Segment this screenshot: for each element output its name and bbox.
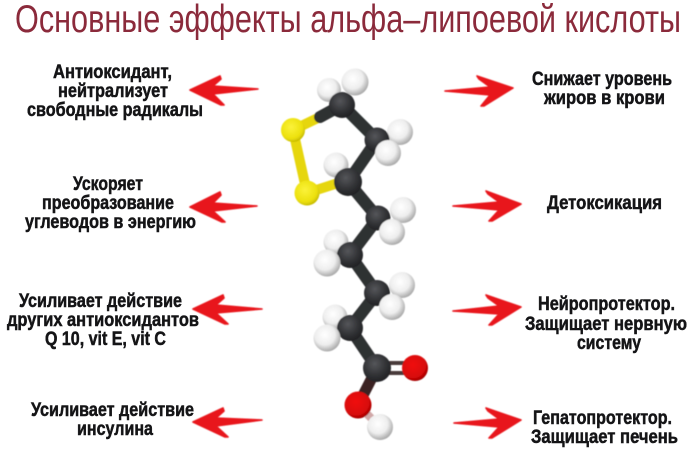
text: right 1: жиров в крови — [543, 88, 665, 109]
arrow: left 1 — [190, 76, 258, 105]
text: left 1 — [27, 62, 203, 121]
text: left 2: преобразование — [42, 193, 174, 214]
carbon atoms — [329, 92, 391, 382]
sulfur atoms — [281, 118, 320, 206]
text: right 2: Детоксикация — [547, 193, 662, 214]
text: right 3 — [525, 294, 687, 354]
arrow: left 3 — [193, 295, 262, 324]
text: right 1 — [532, 69, 672, 109]
text: right 3: систему — [577, 333, 641, 354]
text: left 2: углеводов в энергию — [25, 212, 196, 233]
hydrogen atoms in front — [314, 68, 405, 440]
arrow: right 3 — [453, 295, 521, 325]
arrow: right 2 — [453, 191, 521, 221]
text: left 4: Усиливает действие — [31, 400, 194, 421]
carbon chain bonds — [320, 105, 415, 427]
oxygen atoms — [344, 355, 428, 418]
text: left 3: других антиоксидантов — [7, 310, 199, 331]
text: right 1: Снижает уровень — [532, 69, 672, 90]
arrow: right 4 — [454, 408, 521, 438]
disulfide bonds — [293, 116, 335, 193]
text: right 4: Защищает печень — [531, 427, 678, 448]
text: left 3: Усиливает действие — [19, 291, 182, 312]
text: left 3: Q 10, vit E, vit C — [45, 329, 166, 350]
text: left 2 — [25, 174, 196, 233]
arrow: right 1 — [445, 76, 513, 106]
arrow: left 2 — [190, 192, 257, 222]
text: left 1: Антиоксидант, — [53, 62, 172, 83]
arrow: left 4 — [193, 408, 262, 437]
text: left 1: свободные радикалы — [27, 100, 203, 121]
text: left 4: инсулина — [77, 419, 153, 440]
text: left 2: Ускоряет — [73, 174, 143, 195]
text: right 4 — [531, 408, 678, 448]
text: left 1: нейтрализует — [58, 81, 168, 102]
text: right 4: Гепатопротектор. — [533, 408, 672, 429]
text: left 4 — [31, 400, 194, 440]
text: left 3 — [7, 291, 199, 350]
text: right 3: Нейропротектор. — [538, 294, 675, 315]
hydrogen atoms behind the chain — [317, 78, 416, 330]
molecule: alpha-lipoic acid — [281, 68, 428, 440]
